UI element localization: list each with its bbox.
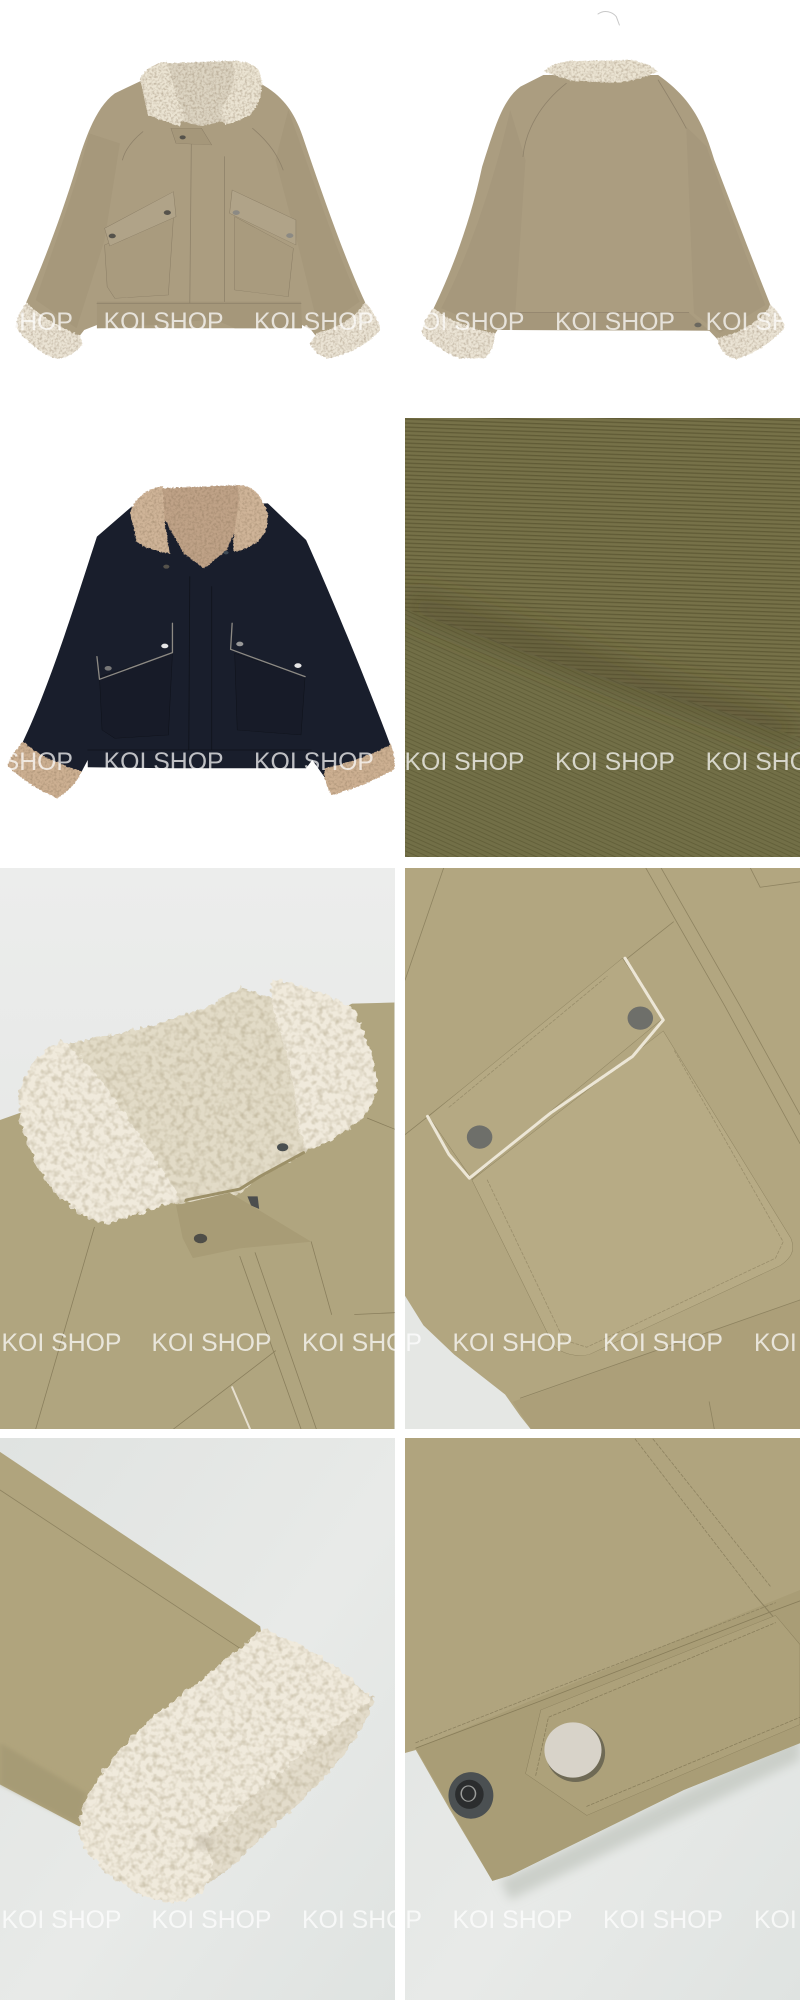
pocket body — [472, 1031, 793, 1355]
left cuff — [16, 303, 83, 358]
panel: collar close-up — [0, 868, 395, 1431]
navy jacket body — [18, 503, 390, 787]
zip and neck tab — [176, 1143, 311, 1258]
watermark row 2 — [0, 748, 800, 776]
icon: dark rivet — [448, 1772, 493, 1819]
navy right cuff — [324, 744, 395, 795]
watermark row 4: KOI SHOP — [302, 1906, 422, 1934]
pocket flap — [428, 958, 663, 1179]
watermark row 3 — [2, 1329, 800, 1357]
cuff outer fold — [80, 1628, 372, 1902]
navy collar lapels — [130, 485, 268, 553]
roll shading — [405, 590, 800, 745]
navy right pocket — [231, 623, 305, 735]
rolled fabric upper — [405, 418, 800, 738]
icon: hanger hook — [598, 11, 619, 25]
right collar lapel — [270, 978, 378, 1151]
cuff hollow shadow — [197, 1836, 211, 1848]
watermark row 3: KOI SHOP — [302, 1329, 422, 1357]
jacket body back — [431, 75, 776, 350]
back left cuff — [422, 308, 495, 358]
right cuff — [310, 302, 380, 358]
hem shadow on backdrop — [500, 1735, 800, 1900]
panel: khaki jacket back — [422, 11, 784, 359]
back right cuff — [717, 305, 784, 359]
watermark row 4: KOI SHOP — [603, 1906, 723, 1934]
watermark row 3: KOI SHOP — [2, 1329, 122, 1357]
navy left pocket — [97, 623, 172, 738]
cuff inner fold — [204, 1696, 375, 1884]
panel: navy jacket — [8, 485, 395, 798]
watermark row 1: KOI SHOP — [254, 308, 374, 336]
navy neck tab — [163, 551, 229, 569]
navy left cuff — [8, 742, 82, 798]
icon: flap snap right — [628, 1007, 653, 1030]
collar lapels — [140, 61, 262, 126]
watermark row 2: KOI SHOP — [404, 748, 524, 776]
lower fabric — [405, 608, 800, 857]
watermark row 2: KOI SHOP — [254, 748, 374, 776]
watermark row 3: KOI SHOP — [452, 1329, 572, 1357]
left pocket — [105, 192, 176, 298]
watermark row 3: KOI SHOP — [152, 1329, 272, 1357]
sleeve lower shade — [0, 1748, 83, 1824]
watermark row 3: KOI SHOP — [603, 1329, 723, 1357]
watermark row 2: KOI SHOP — [555, 748, 675, 776]
watermark row 1: KOI SHOP — [555, 308, 675, 336]
grey backdrop — [0, 868, 395, 1429]
watermark row 4 — [2, 1906, 800, 1934]
hem tab — [526, 1615, 800, 1815]
grey backdrop — [405, 1744, 800, 2000]
panel: cuff close-up — [0, 1438, 395, 2000]
watermark row 1 — [0, 308, 800, 336]
jacket shoulder — [0, 1003, 394, 1431]
watermark row 1: KOI SHOP — [104, 308, 224, 336]
jacket hem — [403, 1437, 800, 1881]
watermark row 1: KOI SHOP — [404, 308, 524, 336]
sleeve — [0, 1452, 265, 1826]
right pocket — [230, 190, 296, 297]
watermark row 4: KOI SHOP — [152, 1906, 272, 1934]
inner collar lining — [56, 987, 309, 1204]
icon: flap snap left — [467, 1125, 492, 1149]
jacket body front — [23, 80, 370, 347]
watermark row 2: KOI SHOP — [104, 748, 224, 776]
grey backdrop — [405, 1296, 530, 1429]
navy collar lining — [158, 485, 244, 568]
watermark row 4: KOI SHOP — [2, 1906, 122, 1934]
icon: large silver snap — [544, 1722, 605, 1782]
jacket panel — [403, 865, 800, 1429]
back collar — [543, 60, 658, 83]
left collar lapel — [19, 1041, 181, 1224]
panel: fabric close-up — [405, 418, 800, 857]
panel: hem snap close-up — [403, 1437, 800, 2000]
grey backdrop — [0, 1438, 395, 2000]
watermark row 4: KOI SHOP — [452, 1906, 572, 1934]
panel: khaki jacket front — [16, 61, 380, 358]
neck tab — [171, 128, 212, 145]
panel: pocket close-up — [403, 865, 800, 1429]
collar lining — [158, 61, 245, 126]
